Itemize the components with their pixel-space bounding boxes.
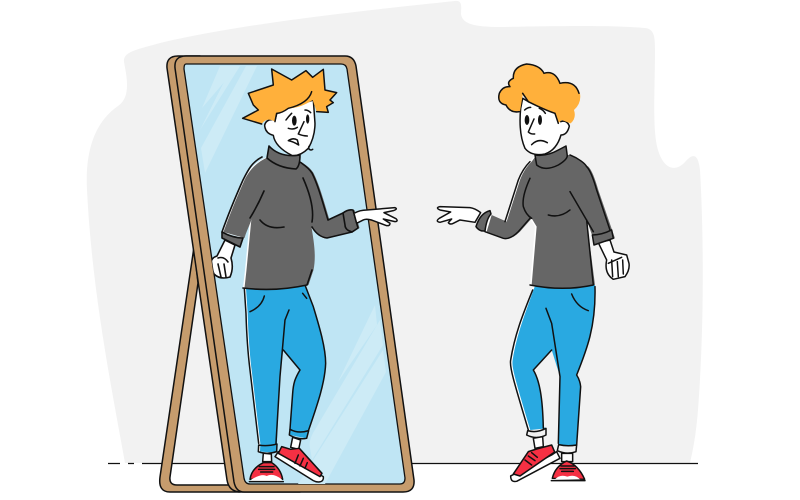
mirror glass — [184, 64, 405, 484]
reflection: sweater — [222, 146, 360, 289]
woman: side shoe — [511, 445, 560, 482]
reflection: spiky hair — [243, 69, 338, 124]
woman: front shoe — [551, 461, 585, 481]
woman: face features — [525, 107, 547, 145]
illustration: woman and distorted mirror reflection — [87, 1, 702, 493]
reflection: jeans — [244, 285, 326, 482]
background blob — [87, 1, 703, 463]
reflection: collar — [267, 146, 300, 169]
reflection: right hand — [354, 208, 397, 226]
woman: fist — [598, 240, 629, 279]
woman: sweater — [476, 146, 615, 288]
glass highlights — [200, 66, 386, 484]
mirror — [160, 56, 414, 492]
woman: jeans — [510, 285, 595, 482]
woman: pointing hand — [437, 207, 481, 224]
reflection: face features — [286, 110, 313, 150]
woman: collar — [535, 146, 567, 168]
woman: socks — [533, 437, 573, 462]
reflection: side shoe — [275, 447, 323, 482]
reflection: left arm hand — [211, 240, 235, 278]
reflection figure — [211, 69, 397, 482]
real woman figure — [437, 64, 629, 482]
woman: head — [499, 64, 580, 155]
reflection: head — [243, 69, 338, 156]
reflection: front shoe — [249, 463, 283, 482]
mirror back frame — [167, 56, 300, 492]
floor line — [108, 462, 698, 464]
mirror stand — [160, 247, 240, 492]
woman: left cuff — [476, 211, 491, 231]
woman: right cuff — [592, 230, 613, 245]
reflection: socks — [263, 437, 301, 462]
woman: curly hair — [499, 64, 580, 123]
reflection: cuffs — [222, 210, 358, 247]
mirror front frame — [175, 56, 414, 492]
